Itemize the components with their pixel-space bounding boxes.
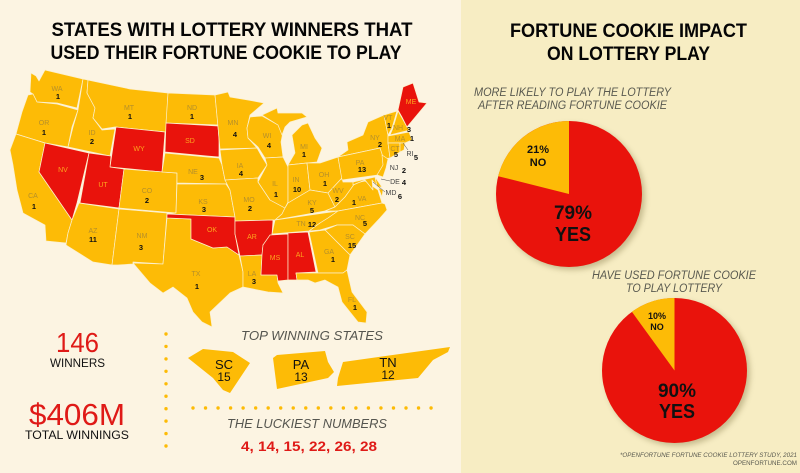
state: ID: 2 <box>90 137 94 146</box>
pie 1 caption: MORE LIKELY TO PLAY THE LOTTERY <box>474 87 672 99</box>
pie chart 2: NO <box>650 322 664 332</box>
state: IL: IL <box>272 181 278 188</box>
state: NY: 2 <box>378 140 382 149</box>
state: AZ <box>66 203 119 265</box>
state: CO: CO <box>142 188 153 195</box>
state: KY: KY <box>307 200 317 207</box>
northeast callout labels <box>373 125 418 201</box>
state: NC <box>309 203 387 234</box>
state: TN: TN <box>296 221 306 228</box>
state: AL <box>288 232 316 280</box>
state: IL <box>258 157 288 208</box>
state: TN: 12 <box>308 220 316 229</box>
state: IA: IA <box>237 163 244 170</box>
northeast callout labels: 1 <box>410 134 414 143</box>
title: fortune cookie impact: FORTUNE COOKIE IMPACT <box>510 20 747 42</box>
state: OR: 1 <box>42 128 46 137</box>
state: WY: WY <box>133 146 145 153</box>
icon: Tennessee: TN <box>379 355 397 370</box>
state: SC: 15 <box>348 241 356 250</box>
state: LA <box>240 255 283 293</box>
state: WV <box>328 178 356 207</box>
state: VA: VA <box>358 196 367 203</box>
left background panel <box>0 0 461 473</box>
state: IN: 10 <box>293 185 301 194</box>
state: NE: NE <box>188 169 198 176</box>
icon: Pennsylvania <box>273 351 334 389</box>
state: CO: 2 <box>145 196 149 205</box>
northeast callout labels: MD <box>386 190 396 197</box>
state: WI: 4 <box>267 141 272 150</box>
pie chart 1 <box>496 121 645 270</box>
pie 1 caption: AFTER READING FORTUNE COOKIE <box>477 100 667 112</box>
state: ND: 1 <box>190 112 194 121</box>
state: TN <box>272 211 338 234</box>
state: VA: 1 <box>352 198 356 207</box>
footnote: OPENFORTUNE.COM <box>733 460 797 467</box>
state: IL: 1 <box>274 190 278 199</box>
heading: top winning states: TOP WINNING STATES <box>241 328 383 343</box>
state: UT <box>80 153 124 208</box>
state: CA: 1 <box>32 202 36 211</box>
state: OR <box>16 94 78 147</box>
state: AZ: AZ <box>89 228 98 235</box>
state: UT: UT <box>98 182 108 189</box>
state: MI: 1 <box>302 150 306 159</box>
state: WV: 2 <box>335 195 339 204</box>
northeast callout labels: 2 <box>402 166 406 175</box>
state: DE <box>375 177 382 187</box>
state: GA: GA <box>324 249 334 256</box>
state: KS <box>167 184 235 217</box>
state: NY: NY <box>370 135 380 142</box>
state: ID: ID <box>88 130 96 137</box>
state: MT: 1 <box>128 112 132 121</box>
icon: South Carolina: SC <box>215 357 233 372</box>
stat: winners: WINNERS <box>50 356 105 370</box>
state: MD <box>353 177 383 197</box>
northeast callout labels: RI <box>406 151 414 158</box>
state: LA: 3 <box>252 277 256 286</box>
state: OH: 1 <box>323 179 327 188</box>
pie chart 2: YES <box>659 401 695 423</box>
state: NE <box>162 153 228 184</box>
state: NM: NM <box>137 233 148 240</box>
stat: winners: 146 <box>56 327 99 358</box>
state: SC: SC <box>345 234 355 241</box>
icon: South Carolina <box>188 349 250 393</box>
state: KS: KS <box>198 199 208 206</box>
state: CT: CT <box>390 146 400 153</box>
state: NJ <box>377 155 388 177</box>
state: ME <box>398 83 427 127</box>
state: MN: 4 <box>233 130 238 139</box>
state: MI: MI <box>300 144 308 151</box>
state: MN <box>215 92 264 149</box>
state: MO <box>225 178 285 221</box>
state: SD: SD <box>185 138 195 145</box>
footnote: *OPENFORTUNE FORTUNE COOKIE LOTTERY STUDY, 2021 <box>620 452 797 459</box>
pie chart 2 <box>602 298 750 446</box>
right background panel <box>461 0 800 473</box>
dotted divider horizontal <box>193 406 432 410</box>
state: NV <box>39 143 89 220</box>
state: ND <box>166 93 218 125</box>
pie chart 1: 21% <box>527 144 549 156</box>
state: TX <box>133 218 243 327</box>
state: SD <box>165 123 219 157</box>
state: WY <box>110 127 165 172</box>
icon: Tennessee <box>337 347 450 386</box>
state: OH <box>307 157 342 193</box>
state: IA <box>220 148 267 180</box>
state: WA: 1 <box>56 92 60 101</box>
state: NH <box>390 111 410 135</box>
pie 2 caption: TO PLAY LOTTERY <box>626 283 723 295</box>
state: IA: 4 <box>239 169 244 178</box>
state: PA <box>338 148 385 180</box>
state: GA <box>309 230 350 273</box>
northeast callout labels: 6 <box>398 192 402 201</box>
heading: luckiest numbers: THE LUCKIEST NUMBERS <box>227 416 387 431</box>
pie chart 2: 10% <box>648 311 666 321</box>
state: TX: 1 <box>195 282 199 291</box>
stat: total winnings: $406M <box>29 397 125 432</box>
state: CT: 5 <box>394 150 398 159</box>
state: ME: ME <box>406 99 417 106</box>
icon: Tennessee: 12 <box>381 368 395 382</box>
state: GA: 1 <box>331 255 335 264</box>
state: IN <box>288 163 310 203</box>
state: RI <box>400 143 405 152</box>
stat: total winnings: TOTAL WINNINGS <box>25 428 129 442</box>
state: NH: NH <box>393 125 403 132</box>
state: MT <box>87 80 168 132</box>
state: PA: PA <box>356 160 365 167</box>
pie 1 caption <box>474 87 672 112</box>
state: AZ: 11 <box>89 235 97 244</box>
state: NC: 5 <box>363 219 367 228</box>
northeast callout labels: NJ <box>390 165 398 172</box>
state: CA: CA <box>28 193 38 200</box>
state: NC: NC <box>355 215 365 222</box>
state: NM: 3 <box>139 243 143 252</box>
state: KY: 5 <box>310 206 314 215</box>
icon: Pennsylvania: 13 <box>294 370 308 384</box>
northeast callout labels: 3 <box>407 125 411 134</box>
state: WA <box>30 70 83 108</box>
pie chart 2: 90% <box>658 381 696 402</box>
state: MO: MO <box>243 197 255 204</box>
state: CA <box>10 134 72 243</box>
pie chart 1: YES <box>555 224 591 246</box>
state: WV: WV <box>332 188 344 195</box>
state: KY <box>275 190 335 220</box>
title: states map <box>50 19 413 64</box>
state: NM <box>112 209 167 265</box>
state: AL: AL <box>296 252 304 259</box>
pie chart 1: 79% <box>554 203 592 224</box>
state: AR <box>235 220 273 256</box>
state: CT <box>388 143 400 159</box>
state: NY <box>338 115 390 159</box>
title: fortune cookie impact <box>510 20 747 65</box>
state: FL <box>296 270 367 323</box>
state: KS: 3 <box>202 205 206 214</box>
state: PA: 13 <box>358 165 366 174</box>
state: FL: FL <box>348 297 356 304</box>
title: states map: USED THEIR FORTUNE COOKIE TO PLAY <box>50 42 402 64</box>
footnote <box>620 452 797 467</box>
state: AR: AR <box>247 234 257 241</box>
state: MI upper <box>262 108 307 135</box>
state: OH: OH <box>319 172 329 179</box>
pie 2 caption: HAVE USED FORTUNE COOKIE <box>592 270 756 282</box>
state: TX: TX <box>192 271 201 278</box>
luckiest numbers list: 4, 14, 15, 22, 26, 28 <box>241 438 377 454</box>
state: MA: MA <box>395 136 406 143</box>
state: VT <box>384 111 397 135</box>
state: MS <box>261 234 288 281</box>
state: ND: ND <box>187 105 197 112</box>
state: NV: NV <box>58 167 68 174</box>
title: states map: STATES WITH LOTTERY WINNERS THAT <box>52 19 413 41</box>
state: OK: OK <box>207 227 217 234</box>
state: ID <box>68 79 115 156</box>
state: VA <box>325 181 382 211</box>
northeast callout labels: 5 <box>414 153 418 162</box>
pie 2 caption <box>592 270 756 295</box>
state: WA: WA <box>51 86 63 93</box>
icon: South Carolina: 15 <box>217 370 231 384</box>
state: LA: LA <box>248 271 257 278</box>
state: WI: WI <box>263 133 271 140</box>
northeast callout labels: DE <box>390 179 400 186</box>
state: MO: 2 <box>248 204 252 213</box>
pie chart 1: NO <box>530 157 547 169</box>
state: MS: MS <box>270 255 281 262</box>
state: CO <box>119 169 177 213</box>
map of US states <box>10 70 427 327</box>
state: WI <box>247 116 283 158</box>
state: OR: OR <box>39 120 49 127</box>
state: SC <box>325 225 365 255</box>
state: IN: IN <box>292 177 300 184</box>
stat: winners <box>50 327 105 370</box>
state: OK <box>167 214 239 255</box>
state: VT: 1 <box>387 121 391 130</box>
state: VT: VT <box>384 115 393 122</box>
state: FL: 1 <box>353 303 357 312</box>
state: MI <box>288 123 322 165</box>
dotted divider vertical <box>164 332 168 448</box>
state: MN: MN <box>228 120 238 127</box>
title: fortune cookie impact: ON LOTTERY PLAY <box>547 43 710 65</box>
state: MA <box>388 132 412 143</box>
state: NE: 3 <box>200 173 204 182</box>
northeast callout labels: 4 <box>402 178 407 187</box>
icon: Pennsylvania: PA <box>293 357 310 372</box>
state: MT: MT <box>124 105 135 112</box>
